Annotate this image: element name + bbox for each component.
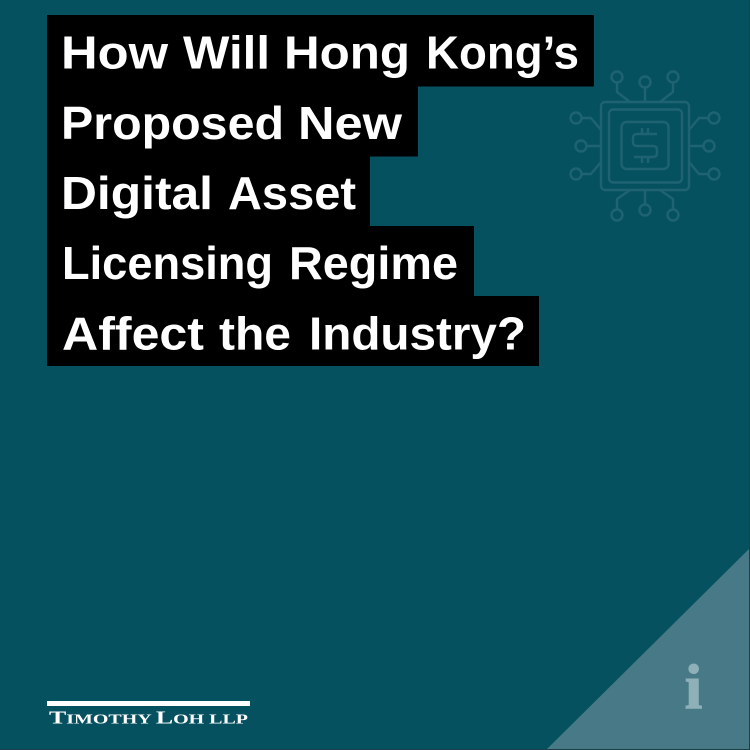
logo: Timothy Loh LLP: T IMOTHY L OH LLP — [49, 708, 248, 728]
title: Affect — [62, 308, 204, 360]
title: Digital — [61, 167, 213, 219]
title: Hong — [284, 26, 410, 78]
title: Kong’s — [426, 26, 579, 78]
title: Licensing — [62, 237, 273, 289]
title: How — [61, 26, 169, 78]
title: the — [219, 308, 291, 360]
title: New — [298, 97, 403, 149]
icon: circuit chip with dollar sign — [570, 72, 720, 220]
info corner triangle — [547, 549, 749, 749]
title: Will — [183, 26, 270, 78]
title: Proposed — [61, 97, 284, 149]
logo: Timothy Loh LLP — [47, 701, 250, 728]
title — [47, 15, 594, 366]
title: Regime — [289, 237, 458, 289]
title: Industry? — [309, 308, 526, 360]
title: Asset — [228, 167, 356, 219]
icon: info letter: i — [685, 651, 702, 722]
